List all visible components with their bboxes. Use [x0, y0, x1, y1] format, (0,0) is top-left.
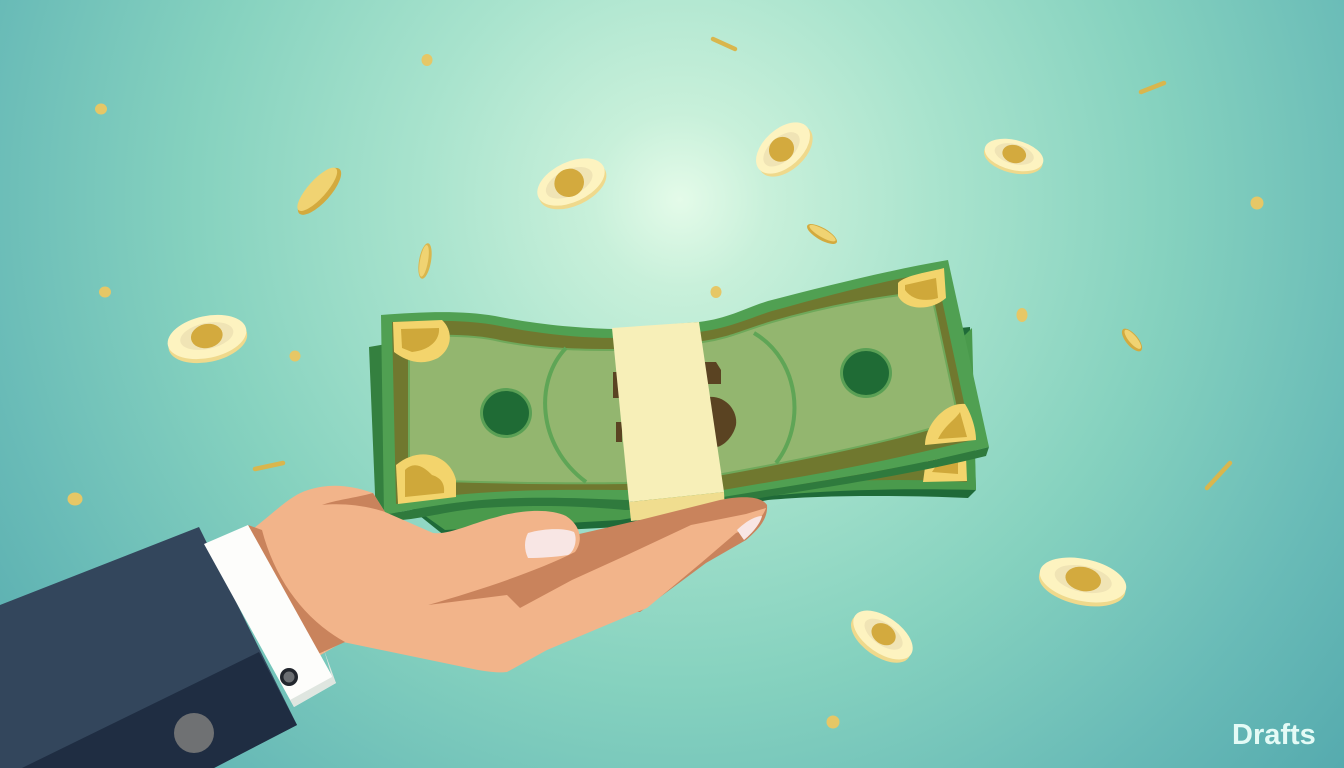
hand [245, 486, 767, 672]
rear note right side [400, 327, 976, 536]
sleeve button [174, 713, 214, 753]
coin streak: top right [1141, 83, 1164, 92]
palm and fingers in shade [428, 497, 767, 612]
paper band [612, 322, 725, 521]
dark seal: left [480, 388, 532, 438]
dark seal: right [840, 348, 892, 398]
gold corner: bottom left [396, 454, 456, 504]
thumb base shadow [322, 493, 385, 512]
gold corner: top right [898, 268, 946, 308]
cufflink [280, 668, 298, 686]
shirt cuff [204, 525, 336, 707]
edge-on coin: right [1118, 325, 1146, 355]
coin: top centre right [747, 112, 822, 187]
edge-on coin: upper left [290, 161, 348, 221]
rear note brown strip and corner [760, 464, 967, 488]
finger nail [737, 516, 762, 540]
dollar sign fragments [613, 372, 620, 398]
coin streak: right [1207, 463, 1230, 488]
front note brown border [392, 272, 972, 504]
gold corner: bottom right [925, 404, 976, 445]
coin: lower right [1035, 550, 1130, 614]
banknote stack [369, 260, 989, 536]
edge-on coin: centre [804, 220, 840, 248]
coin: left [164, 308, 251, 370]
coin: top right [981, 133, 1047, 180]
main hand with thumb and finger [245, 486, 766, 672]
confetti dots [68, 54, 1264, 728]
coin streak: left [255, 463, 283, 469]
coin: lower centre [843, 601, 921, 673]
front note outer green [381, 260, 989, 515]
rear note left edge [369, 343, 400, 520]
edge-on coin: small left [416, 242, 434, 280]
watermark: Drafts: Drafts [1232, 719, 1316, 751]
coin: top centre left [530, 149, 614, 219]
gold corner: top left [393, 320, 450, 362]
wrist shadow [248, 525, 345, 654]
suit sleeve [0, 527, 297, 768]
medallion ring [545, 348, 586, 482]
coin streak: top [713, 39, 735, 49]
thumb nail [525, 529, 576, 558]
front note light field [409, 291, 958, 483]
